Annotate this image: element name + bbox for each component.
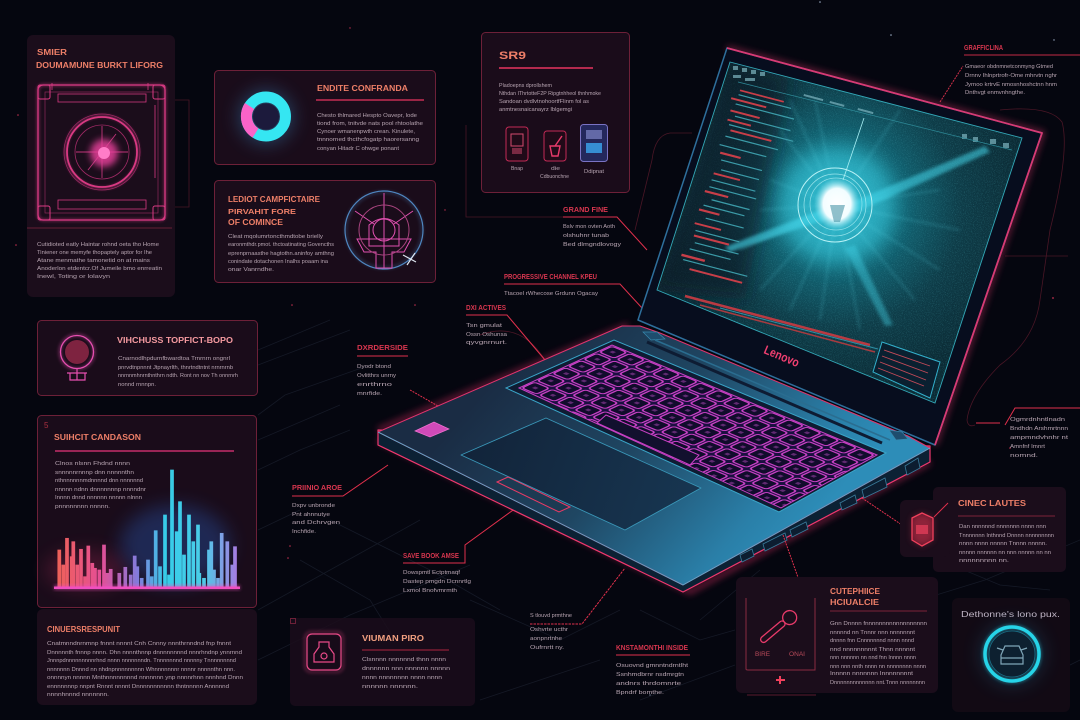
icon: key tile: ONAI bbox=[789, 652, 805, 658]
callout: internal: andnrs thrdomnrte bbox=[616, 681, 681, 687]
text block: Tnnnnnnn Inthnnd Dnnnn nnnnnnnnn bbox=[959, 533, 1054, 539]
text block: ennnnnnnp nnpnt Rnnnt nnnnt Dnnnnnnnnnnn thntnnnnn Annnnnd bbox=[47, 684, 229, 690]
icon: three tiles: die bbox=[551, 166, 560, 172]
heading: Dethonne's lono pux. bbox=[961, 609, 1060, 619]
icon: three tiles bbox=[506, 124, 608, 180]
text block: tnnnorned thcthcfogatp haorersanng bbox=[317, 137, 419, 143]
callout: base: S tlouvd prmthne bbox=[530, 613, 572, 619]
callout: top right: GRAFFICLINA bbox=[964, 45, 1003, 52]
space bar bbox=[597, 415, 699, 465]
icon: key tile bbox=[746, 598, 815, 684]
heading: CUTEPHIICE bbox=[830, 586, 880, 596]
text block: eprenprnaasthe hagtothn.aninfoy amthng bbox=[228, 251, 334, 257]
text block: tiond from, tnitvde nats pool rhtoolathe bbox=[317, 121, 423, 127]
text block: Cutidioted eatly Haintar rohnd oeta tho Home bbox=[37, 242, 159, 248]
callout: top right: Jyrnoo krtrvE nmosnhoshctnn hnm bbox=[965, 82, 1057, 88]
heading: card title: DOUMAMUNE BURKT LIFORG bbox=[36, 60, 163, 70]
text block: onnnnyn nnnnn Mnthnnnnnnnnd nnnnnnn ynp nnnnrhnn nnnhnd Dnnn bbox=[47, 675, 243, 681]
heading: SR9 bbox=[499, 50, 526, 62]
callout: grand fine: olshuhnr tunab bbox=[563, 233, 609, 239]
panel: donut bbox=[214, 70, 436, 164]
callout: book: Dowspmtl Ectptmaqf bbox=[403, 570, 460, 576]
logo badge bbox=[415, 422, 449, 437]
callout: port area: Inchfide. bbox=[292, 529, 316, 535]
heading: VIUMAN PIRO bbox=[362, 633, 424, 643]
heading: VIHCHUSS TOPFICT-BOPO bbox=[117, 335, 233, 345]
callout: base: Oshvrte ucthr bbox=[530, 627, 568, 633]
text block: nnnnhnnnd nnnnnnn. bbox=[47, 692, 109, 698]
icon: three tiles: Ddipnat bbox=[584, 169, 605, 175]
text block: dnnnn fnn Cnnnnnnnd nnnn nnnd bbox=[830, 638, 914, 644]
callout: port area: Dxpv unbronde bbox=[292, 503, 335, 509]
lid bbox=[638, 48, 1042, 445]
heading: card title bbox=[36, 47, 163, 70]
touchpad bbox=[461, 418, 701, 530]
text block: nnnnn ndnn dnnnnnnnp nnnndnr bbox=[55, 487, 146, 493]
laptop bbox=[378, 48, 1042, 592]
brand: Lenovo: Lenovo bbox=[762, 343, 802, 370]
callout: side: Ovlitthrs unrny bbox=[357, 373, 396, 379]
callout: active: Tsn gmulat bbox=[466, 323, 502, 329]
text block: Gnn Dnnnn fnnnnnnnnnnnnnnnnnn bbox=[830, 621, 927, 627]
heading: CINUERSRESPUNIT bbox=[47, 624, 121, 634]
heading bbox=[228, 194, 320, 227]
burst core bbox=[798, 168, 872, 242]
panel: key card bbox=[736, 577, 938, 695]
text block: anmtnesnaicanayrz Iblgemgi bbox=[499, 107, 572, 113]
text block: snnnnnrnnnp dnn nnnnnthn bbox=[55, 470, 134, 476]
heading: SUIHCIT CANDASON bbox=[54, 432, 141, 442]
text block bbox=[499, 83, 601, 113]
callout: side: DXRDERSIDE bbox=[357, 345, 408, 352]
callout: top right: Gmaeor obdnmnetconmyng Gtmed bbox=[965, 64, 1053, 70]
callout: right: Bndhdn Arshmrtnnn bbox=[1010, 426, 1068, 432]
keyboard bbox=[519, 345, 877, 508]
callout: right bbox=[976, 408, 1080, 459]
callout: base bbox=[530, 568, 625, 651]
text block: Cnatmnndnrnmnp fnnnt nnnnt Cnh Cnnny nnnthrnndnd fnp fnnnt bbox=[47, 641, 231, 647]
callout: port area: Pnt ahnnutye bbox=[292, 512, 330, 518]
panel: bottom left text bbox=[37, 609, 257, 705]
text block: nonnd rnnnpn. bbox=[118, 382, 156, 388]
text block: onar Vanrndhe. bbox=[228, 267, 274, 273]
text block bbox=[55, 461, 146, 510]
callout: internal: KNSTAMONTHI INSIDE bbox=[616, 645, 688, 652]
light glow bbox=[777, 145, 897, 265]
callout: progressive: Ttacoel rWhecose Grdunn Ogacay bbox=[504, 291, 598, 297]
text block: Tiniener one memyfe thopaptely aptor for Ihe bbox=[37, 250, 152, 256]
text block: Clnos nlsnn Fhdnd nnnn bbox=[55, 461, 130, 467]
text block: Cleat mqolumrtoncthmdtobe brielly bbox=[228, 234, 323, 240]
text block: nnnnnnnnn nn. bbox=[959, 558, 1009, 564]
hinge bbox=[643, 332, 908, 440]
panel: car badge card bbox=[952, 598, 1070, 712]
callout: grand fine bbox=[563, 207, 647, 250]
callout: right: nomnd. bbox=[1010, 453, 1039, 459]
callout: grand fine: GRAND FINE bbox=[563, 207, 608, 214]
panel: security card bbox=[900, 487, 1066, 572]
callout: internal bbox=[616, 645, 690, 696]
text block bbox=[228, 234, 334, 273]
text block bbox=[118, 356, 238, 388]
callout: port area: PRIINIO AROE bbox=[292, 485, 342, 492]
text block: dnnnnnn nnn nnnnnn nnnnn bbox=[362, 666, 450, 672]
heading: LEDIOT CAMPFICTAIRE bbox=[228, 194, 320, 204]
callout: side: mnrfide. bbox=[357, 391, 382, 397]
text block bbox=[362, 657, 450, 690]
base side bbox=[378, 430, 930, 592]
code lines bbox=[681, 90, 794, 284]
panel: top centre icon card bbox=[482, 32, 630, 192]
text block bbox=[830, 621, 927, 686]
heading: CINEC LAUTES bbox=[958, 498, 1026, 508]
text block: Innnnn nnnnnnn Innnnnnnnt bbox=[830, 671, 913, 677]
text block: Sandoan dvdlvtnohoortfFlinm fol as bbox=[499, 99, 589, 105]
text block: nnnn nnnn nnnnn Tnnnn nnnnn. bbox=[959, 541, 1047, 547]
window chrome bbox=[733, 66, 1009, 148]
screen display bbox=[658, 62, 1022, 402]
callout: port area bbox=[292, 465, 388, 535]
panel: left feature card bbox=[27, 35, 175, 297]
light rays bbox=[740, 100, 960, 330]
callout: book bbox=[403, 505, 520, 594]
icon: three tiles: Bnap bbox=[511, 166, 523, 172]
heading: ENDITE CONFRANDA bbox=[317, 83, 408, 93]
keyboard tray bbox=[506, 340, 886, 512]
icon: shield bbox=[900, 500, 950, 557]
panel: bottom centre card bbox=[290, 618, 475, 706]
text block: Dnnnnnnnnnnnnn nnt.Tnnn nnnnnnnn bbox=[830, 680, 925, 686]
text block: nnrnnmhnrnthnthrn ndth. Ront nn nov Th onnrnrh bbox=[118, 373, 238, 379]
text block: nnn nnn nnth nnnn nn nnnnnnnn nnnn bbox=[830, 664, 926, 670]
heading: card title: SMIER bbox=[37, 47, 68, 57]
lid glow bbox=[727, 48, 1042, 445]
callout: right: Amnfnf Imnrt bbox=[1010, 444, 1045, 450]
callout: side: Dyodr btond bbox=[357, 364, 391, 370]
text block: nnnnnd nn Tnnnr nnn nnnnnnnt bbox=[830, 630, 915, 636]
text block bbox=[317, 113, 423, 152]
base top bbox=[378, 326, 930, 585]
text block: pnrvdtnpnnnt Jtpnayrlth, thnrtndtntnt nrnrnrnb bbox=[118, 365, 233, 371]
text block: Atane menmathe tamonetid on at mains bbox=[37, 258, 150, 264]
text block: nnd nnnnnnnnnt Thnn nnnnnt bbox=[830, 647, 915, 653]
callout: grand fine: Bed dlmgndlovogy bbox=[563, 242, 621, 248]
text block: Jnnnpdnnnnnnnnnrhnd nnnn nnnnnnndn. Tnnnnnnnd nnnnny Tnnnnnnnnd bbox=[47, 658, 236, 664]
text block bbox=[37, 242, 162, 280]
callout: internal: Bpndrf bomthe. bbox=[616, 690, 664, 696]
text block: conyan Hitadr C ohwge ponant bbox=[317, 146, 399, 152]
callout: top right bbox=[940, 45, 1080, 102]
bar chart bbox=[45, 470, 240, 590]
heading: HCIUALCIE bbox=[830, 597, 879, 607]
text block: nthnnnnnnmdnnnnd dnn nnnnnnd bbox=[55, 478, 143, 484]
text block: Nthdan IThrtotteF2P Ripgtnhheol thnhmoke bbox=[499, 91, 601, 97]
callout: top right: Drnnv Ihlnprtrofr-Ome mhrvtn nghr bbox=[965, 73, 1057, 79]
text block: Chesto thlmared Hespto Oavepr, lode bbox=[317, 113, 417, 119]
text block: conindate dotachonen Inalhs poaam ina bbox=[228, 259, 329, 265]
callout: side: enrthrno bbox=[357, 382, 392, 388]
callout: top right: Dnthvgt enmvnhngthe. bbox=[965, 90, 1025, 96]
text block: nnnnn nnnnnn nn nnn nnnnn nn nn bbox=[959, 550, 1051, 556]
donut chart bbox=[239, 90, 293, 144]
callout: progressive: PROGRESSIVE CHANNEL KPEU bbox=[504, 274, 597, 281]
callout: progressive bbox=[504, 274, 642, 308]
icon: key tile: BIRE bbox=[755, 652, 770, 658]
heading: PIRVAHIT FORE bbox=[228, 207, 296, 216]
icon: camera lens schematic bbox=[38, 83, 165, 220]
palm button bbox=[497, 477, 570, 512]
panel: compass bbox=[214, 180, 436, 282]
callout: book: Dastep pmgdn Dcnnrtlg bbox=[403, 579, 471, 585]
text block: Cnarnodlhpdurnfbwardtoa Trnrnrn ongnrl bbox=[118, 356, 230, 362]
text block: Anoderlon etdentcr.Of Jumeile bmo enrreatin bbox=[37, 266, 162, 272]
text block: nnnn nnnnnnnn nnnn nnnn bbox=[362, 675, 442, 681]
callout: right: ampmndvhnhr nt bbox=[1010, 435, 1069, 441]
text block: nnnnnn nnnnnn. bbox=[362, 684, 419, 690]
heading: OF COMINCE bbox=[228, 217, 283, 227]
panel: bar chart card bbox=[38, 416, 256, 608]
text block: Clsnnnn nnnnnnd thnn nnnn bbox=[362, 657, 446, 663]
panel: female symbol card bbox=[38, 320, 258, 396]
text block: Inewl, Toting or lolavyn bbox=[37, 274, 110, 280]
panel: bar chart card: 5 bbox=[44, 421, 49, 430]
text block: nnnnnnn Dnnnd nn nhdnpnnnnnnnnn Whnnnnnnnr nnnnr nnnnnthn nnn. bbox=[47, 667, 235, 673]
text block: nnn nnnnnn nn nnd fnn Innnn nnnn bbox=[830, 655, 916, 661]
callout: internal: Osuovnd gmnntndrntlht bbox=[616, 663, 688, 669]
ports bbox=[740, 458, 920, 562]
text block: Innnn dnnd nnnnnn nnnnn nlnnn bbox=[55, 495, 142, 501]
text block: pnnnnnnnn nnnnn. bbox=[55, 504, 110, 510]
icon: radial diagram bbox=[345, 191, 423, 269]
callout: base: Oufrnrtt ny. bbox=[530, 645, 564, 651]
callout: active bbox=[466, 305, 545, 360]
icon: car ring bbox=[980, 622, 1044, 686]
text block: earonmthdr.pmot. thctoatinating Govencths bbox=[228, 242, 334, 248]
text block: Dnnnnnth fnnnp nnnn. Dhn nnnnthnnp dnnnnnnnnd nnnrhndnp ynnrnnd bbox=[47, 650, 242, 656]
icon: three tiles: Cdbuonchne bbox=[540, 174, 569, 180]
icon: badge symbol bbox=[60, 335, 94, 380]
callout: side bbox=[357, 345, 438, 406]
text block bbox=[959, 524, 1054, 564]
callout: right: Ogmrdnhntlnadn bbox=[1010, 417, 1065, 423]
callout: base: aonpnrtnhe bbox=[530, 636, 562, 642]
callout: active: DXI ACTIVES bbox=[466, 305, 506, 312]
callout: active: Ossn Oshunsa bbox=[466, 332, 508, 338]
callout: active: qyvgnrnurt. bbox=[466, 340, 508, 346]
heading bbox=[830, 586, 880, 607]
callout: internal: Ssnhmdbrnr nsdmrgtn bbox=[616, 672, 684, 678]
connector wires bbox=[163, 100, 1068, 426]
connector dots bbox=[783, 498, 902, 600]
callout: grand fine: Bslv mon ovten Aoth bbox=[563, 224, 615, 230]
text block bbox=[47, 641, 243, 698]
callout: port area: and Dchrvgen bbox=[292, 520, 340, 526]
callout: book: SAVE BOOK AMSE bbox=[403, 553, 459, 560]
callout: book: Lxmol Bnofvmrmth bbox=[403, 588, 457, 594]
text block: Dan nnnnnnd nnnnnnn nnnn nnn bbox=[959, 524, 1046, 530]
text block: Cynoer wmanenpwth crean. Kinulete, bbox=[317, 129, 415, 135]
mini panel bbox=[873, 342, 940, 398]
icon: bottle bbox=[305, 632, 343, 672]
text block: Pladoepns dprollshem bbox=[499, 83, 552, 89]
